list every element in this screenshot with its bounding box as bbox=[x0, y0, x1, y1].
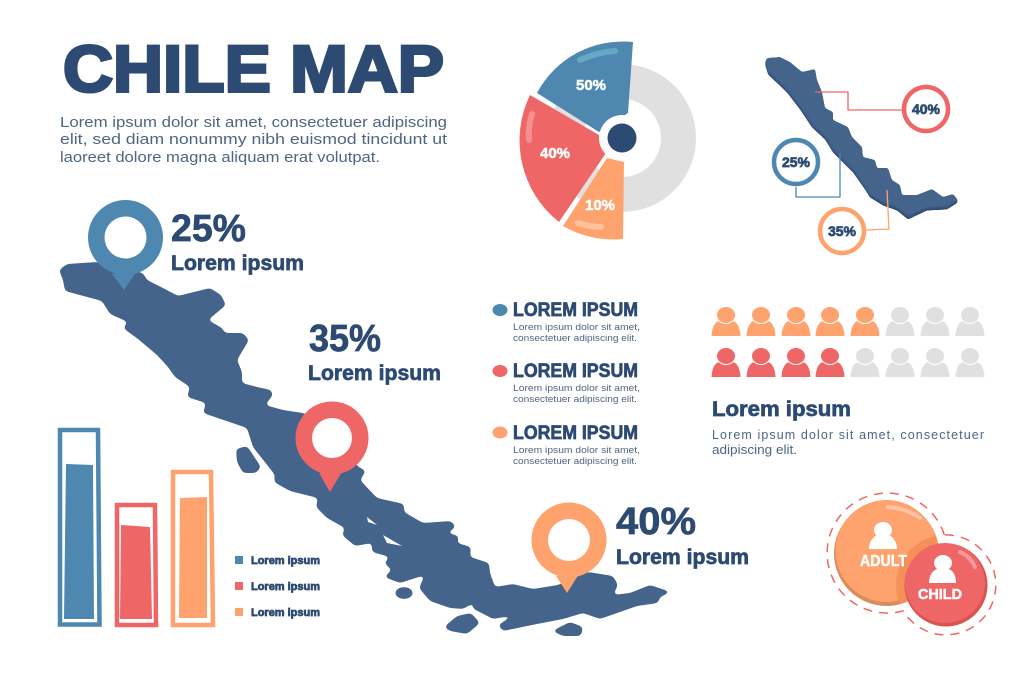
legend item: blue: LOREM IPSUM bbox=[513, 300, 638, 321]
callout: 25 percent: Lorem ipsum bbox=[171, 252, 304, 275]
row 1: five of eight orange bbox=[712, 306, 984, 336]
donut pie chart bbox=[520, 41, 678, 239]
legend item: red: LOREM IPSUM bbox=[513, 361, 638, 382]
people chart text: Lorem ipsum dolor sit amet, consectetuer bbox=[712, 428, 984, 442]
wedge: 50 percent bbox=[537, 41, 633, 132]
dashed outline bbox=[827, 493, 996, 635]
large map of Chile bbox=[59, 262, 671, 636]
bar: red bbox=[117, 505, 156, 625]
people chart text bbox=[712, 398, 984, 457]
people chart text: adipiscing elit. bbox=[712, 443, 797, 457]
adult and child bubbles bbox=[827, 493, 996, 635]
wedge: 40 percent: 40% bbox=[540, 145, 570, 162]
callout: 35 percent: 35% bbox=[828, 223, 857, 239]
small map shape bbox=[765, 57, 958, 220]
callout: 25 percent bbox=[171, 208, 304, 275]
intro text block: Lorem ipsum dolor sit amet, consectetuer adipiscing bbox=[60, 115, 447, 131]
legend item: blue: Lorem ipsum dolor sit amet, bbox=[513, 322, 640, 333]
intro text block: elit, sed diam nonummy nibh euismod tincidunt ut bbox=[60, 132, 447, 148]
legend item: blue: consectetuer adipiscing elit. bbox=[513, 333, 637, 344]
intro text block bbox=[60, 115, 447, 166]
callout: 25 percent bbox=[774, 140, 840, 197]
intro text block: laoreet dolore magna aliquam erat volutpat. bbox=[60, 150, 380, 166]
adult bubble: ADULT bbox=[860, 553, 907, 570]
bar chart legend: Lorem ipsum bbox=[251, 607, 320, 619]
bar chart bbox=[60, 430, 213, 625]
wedge: 10 percent: 10% bbox=[585, 197, 615, 214]
wedge: 10 percent bbox=[563, 158, 624, 239]
centre legend bbox=[492, 300, 640, 467]
wedge: 50 percent: 50% bbox=[576, 77, 606, 94]
row 2: four of eight red bbox=[712, 348, 984, 377]
title: CHILE MAP bbox=[63, 32, 444, 106]
callout: 25 percent: 25% bbox=[171, 208, 246, 250]
map pin: blue bbox=[88, 200, 163, 290]
callout: 35 percent bbox=[820, 190, 889, 253]
bar chart legend: Lorem ipsum bbox=[251, 581, 320, 593]
bar: orange bbox=[173, 472, 213, 625]
callout: 40 percent: Lorem ipsum bbox=[616, 546, 749, 569]
adult bubble bbox=[834, 500, 938, 606]
callout: 40 percent bbox=[616, 501, 749, 569]
map pin: red bbox=[296, 402, 368, 492]
legend item: blue bbox=[492, 300, 640, 344]
child bubble: CHILD bbox=[918, 586, 962, 603]
callout: 35 percent: 35% bbox=[309, 318, 381, 360]
callout: 40 percent: 40% bbox=[616, 501, 696, 543]
callout: 35 percent bbox=[308, 318, 441, 385]
wedge: 40 percent bbox=[520, 95, 606, 222]
people chart text: Lorem ipsum bbox=[712, 398, 851, 421]
map pin: orange bbox=[532, 502, 606, 593]
legend item: orange: Lorem ipsum dolor sit amet, bbox=[513, 445, 640, 456]
callout: 35 percent: Lorem ipsum bbox=[308, 362, 441, 385]
bar chart legend: Lorem ipsum bbox=[251, 555, 320, 567]
legend item: orange: consectetuer adipiscing elit. bbox=[513, 456, 637, 467]
small map with callouts bbox=[765, 57, 958, 253]
callout: 25 percent: 25% bbox=[782, 154, 811, 170]
grey ring bbox=[566, 82, 678, 194]
child bubble bbox=[904, 543, 988, 626]
bar: blue bbox=[60, 430, 100, 624]
legend item: orange bbox=[492, 423, 640, 467]
callout: 40 percent: 40% bbox=[912, 101, 941, 117]
callout: 40 percent bbox=[815, 87, 948, 131]
hub bbox=[599, 115, 645, 161]
legend item: red bbox=[492, 361, 640, 405]
bar chart legend bbox=[235, 555, 320, 619]
people pictogram chart bbox=[712, 306, 984, 377]
legend item: orange: LOREM IPSUM bbox=[513, 423, 638, 444]
legend item: red: Lorem ipsum dolor sit amet, bbox=[513, 383, 640, 394]
legend item: red: consectetuer adipiscing elit. bbox=[513, 394, 637, 405]
